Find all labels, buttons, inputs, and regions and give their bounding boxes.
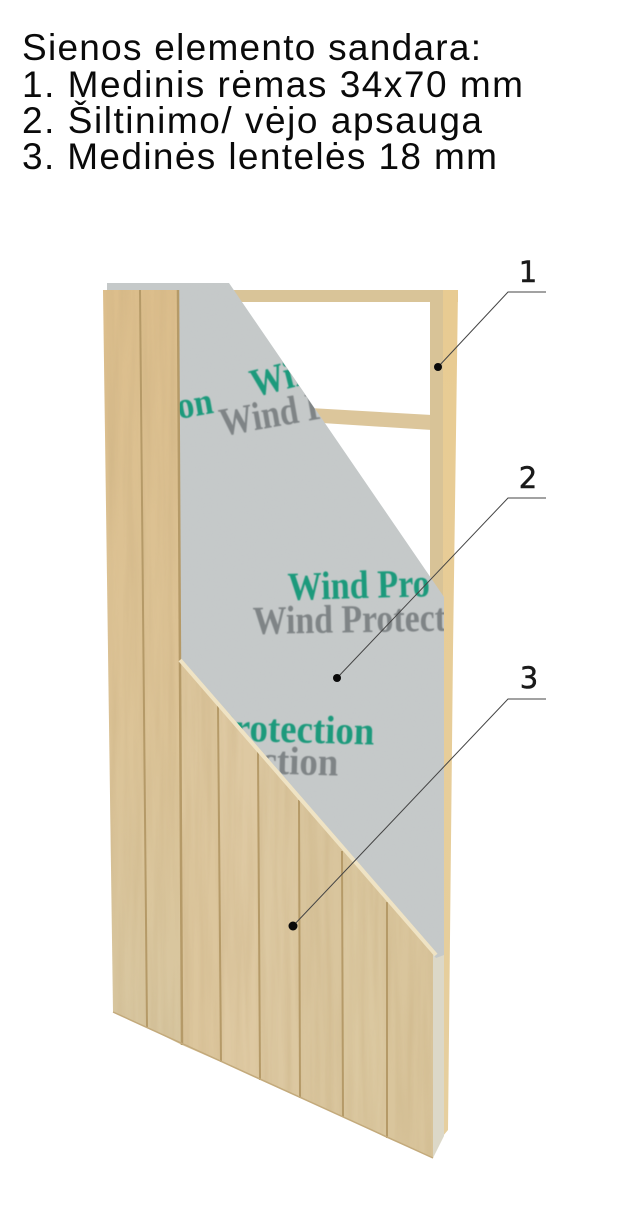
sheet printing: Wind Protection: on [173, 380, 216, 427]
sheet printing: Wind Protection: Wind Pro [287, 562, 430, 610]
windproof sheet [107, 283, 447, 958]
side edge of cladding [433, 950, 444, 1158]
title: wall element structure: 2. Šiltinimo/ vėjo apsauga [22, 100, 482, 141]
callout 3: boards [288, 661, 546, 930]
callout 1: frame: 1 [519, 255, 537, 289]
title: wall element structure: 1. Medinis rėmas 34x70 mm [22, 64, 523, 105]
wall element illustration [103, 283, 458, 1158]
sheet printing: Wind Protection: Protection [175, 737, 339, 785]
title: wall element structure [22, 27, 523, 177]
sheet printing: Wind Protection: Wind [246, 344, 335, 406]
callout 1: frame [434, 255, 546, 371]
cladding boards [103, 290, 433, 1158]
sheet printing: Wind Protection: Wind Protect [216, 368, 412, 445]
sheet printing: Wind Protection: Wind Protect [252, 595, 447, 643]
title: wall element structure: 3. Medinės lentelės 18 mm [22, 136, 497, 177]
callout 2: wind protection [333, 461, 546, 682]
callout 2: wind protection: 2 [519, 461, 537, 495]
bottom shadow edge [113, 1012, 433, 1158]
title: wall element structure: Sienos elemento sandara: [22, 27, 481, 68]
light cut edge of boards [180, 660, 436, 955]
board grooves [140, 290, 387, 1138]
wood grain texture [103, 290, 433, 1158]
sheet printing: Wind Protection [173, 344, 447, 785]
wooden frame [232, 290, 458, 1136]
sheet printing: Wind Protection: Protection [211, 706, 375, 754]
callout 3: boards: 3 [520, 661, 538, 695]
